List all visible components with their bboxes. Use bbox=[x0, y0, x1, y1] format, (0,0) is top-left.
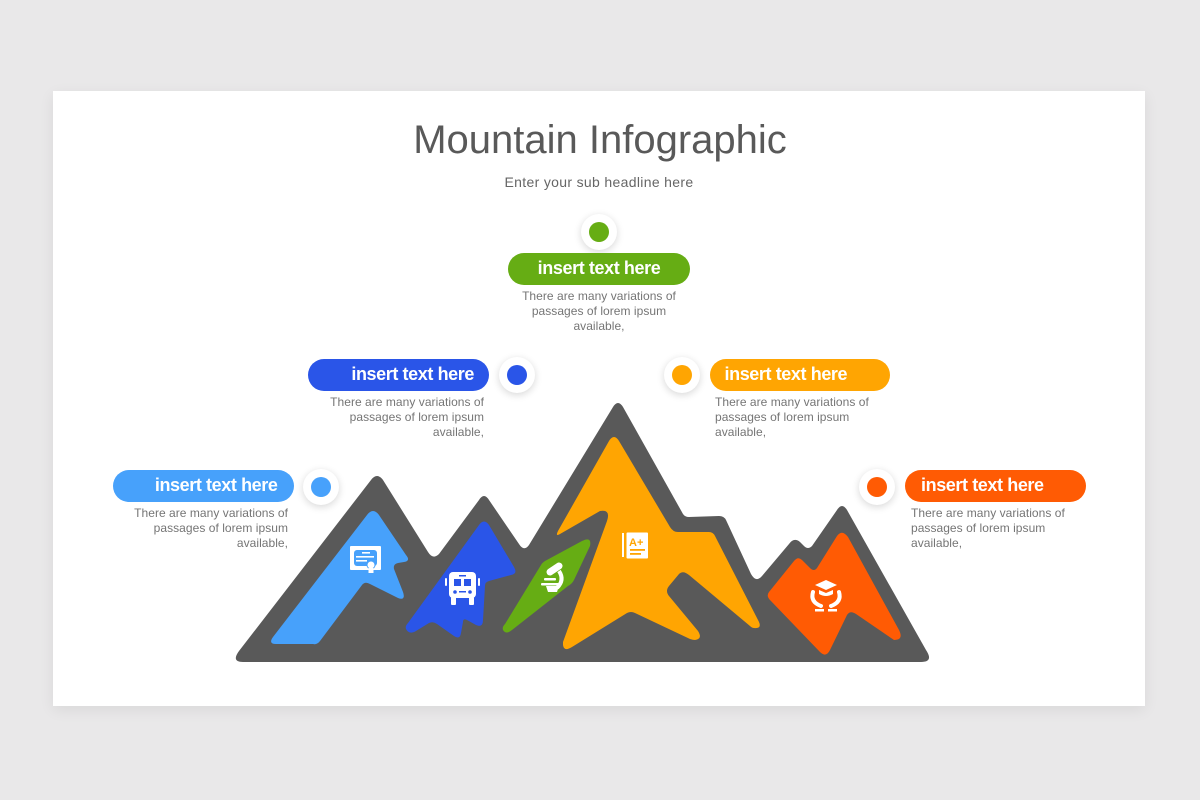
text block: green bbox=[522, 289, 676, 333]
icon: hands with graduation cap bbox=[812, 580, 840, 612]
title: Mountain Infographic bbox=[413, 118, 787, 162]
icon: report card: A+ bbox=[629, 537, 643, 549]
text block: orange: available, bbox=[911, 536, 962, 550]
icon: microscope bbox=[541, 566, 562, 592]
subtitle: Enter your sub headline here bbox=[504, 174, 694, 190]
pill: light blue bbox=[112, 470, 294, 502]
peak: blue bbox=[406, 522, 515, 637]
text block: amber: available, bbox=[715, 425, 766, 439]
marker: blue bbox=[498, 357, 534, 393]
text block: blue: There are many variations of bbox=[330, 395, 484, 409]
marker: orange bbox=[859, 469, 895, 505]
icon: report card bbox=[622, 532, 648, 558]
text block: green: There are many variations of bbox=[522, 289, 676, 303]
pill: green: insert text here bbox=[538, 258, 660, 278]
pill: blue bbox=[308, 359, 489, 390]
peak: light blue bbox=[271, 511, 408, 644]
marker: amber bbox=[664, 357, 700, 393]
pill: light blue: insert text here bbox=[155, 475, 278, 495]
text block: amber: passages of lorem ipsum bbox=[715, 410, 849, 424]
text block: orange: There are many variations of bbox=[911, 506, 1065, 520]
marker: green bbox=[580, 214, 616, 250]
text block: blue bbox=[330, 395, 484, 439]
text block: amber bbox=[715, 395, 869, 439]
text block: light blue: available, bbox=[237, 536, 288, 550]
text block: green: passages of lorem ipsum bbox=[532, 304, 666, 318]
peak: amber bbox=[557, 437, 760, 649]
peak: orange bbox=[768, 533, 901, 655]
pill: blue: insert text here bbox=[351, 364, 474, 384]
peak: green bbox=[503, 539, 590, 632]
text block: orange: passages of lorem ipsum bbox=[911, 521, 1045, 535]
pill: amber bbox=[710, 359, 890, 390]
text block: light blue: passages of lorem ipsum bbox=[154, 521, 288, 535]
icon: bus bbox=[445, 572, 480, 605]
pill: orange: insert text here bbox=[921, 475, 1044, 495]
text block: amber: There are many variations of bbox=[715, 395, 869, 409]
text block: green: available, bbox=[573, 319, 625, 333]
mountain silhouette bbox=[236, 403, 929, 662]
icon: certificate bbox=[350, 546, 381, 573]
text block: light blue: There are many variations of bbox=[134, 506, 288, 520]
pill: amber: insert text here bbox=[724, 364, 847, 384]
marker: light blue bbox=[303, 469, 339, 505]
pill: green bbox=[508, 253, 690, 284]
text block: blue: passages of lorem ipsum bbox=[350, 410, 484, 424]
panel: white slide bbox=[53, 91, 1145, 706]
pill: orange bbox=[905, 470, 1086, 502]
text block: light blue bbox=[134, 506, 288, 550]
text block: blue: available, bbox=[433, 425, 484, 439]
text block: orange bbox=[911, 506, 1065, 550]
